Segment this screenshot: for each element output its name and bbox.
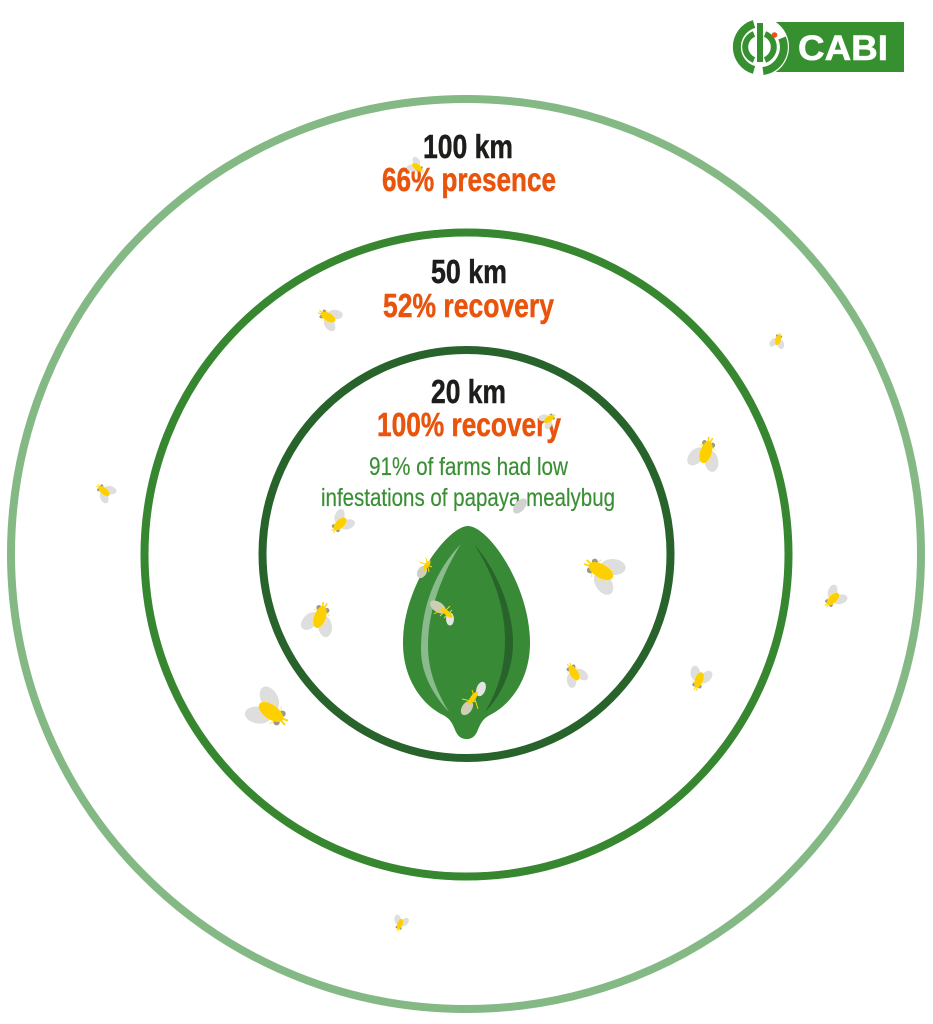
text: farm infestation finding: 91% of farms had low (369, 453, 569, 481)
text: farm infestation finding: infestations of papaya mealybug (321, 484, 615, 512)
logo: CABI: CABI (798, 29, 888, 68)
icon: fly (296, 596, 343, 642)
label: 100 km: 100 km (423, 128, 513, 165)
icon: fly (574, 543, 632, 602)
icon: fly (389, 912, 412, 934)
icon: fly (817, 580, 852, 615)
label: 50 km: 50 km (431, 253, 507, 290)
icon: fly (683, 662, 716, 695)
label: 20 km: 20 km (431, 373, 506, 410)
label: 52% recovery: 52% recovery (383, 287, 555, 324)
logo: CABI (729, 17, 904, 77)
icon: fly (323, 505, 359, 541)
ring: 50 km radius (144, 232, 788, 876)
leaf: papaya (403, 526, 530, 739)
icon: fly (557, 657, 592, 692)
ring: 20 km radius (262, 350, 670, 758)
icon: fly (536, 407, 561, 432)
label: 66% presence: 66% presence (382, 161, 556, 198)
icon: fly (238, 679, 300, 742)
icon: fly (767, 331, 788, 351)
icon: fly (682, 432, 729, 477)
icon: fly on leaf (428, 598, 454, 626)
icon: fly (312, 300, 347, 335)
icon: fly (90, 477, 120, 507)
icon: fly on leaf (415, 558, 432, 580)
text: farm infestation finding (321, 453, 615, 512)
icon: fly (404, 154, 429, 179)
icon: fly wing (510, 496, 530, 516)
icon: fly on leaf (458, 680, 488, 717)
label: 100% recovery: 100% recovery (377, 406, 562, 443)
